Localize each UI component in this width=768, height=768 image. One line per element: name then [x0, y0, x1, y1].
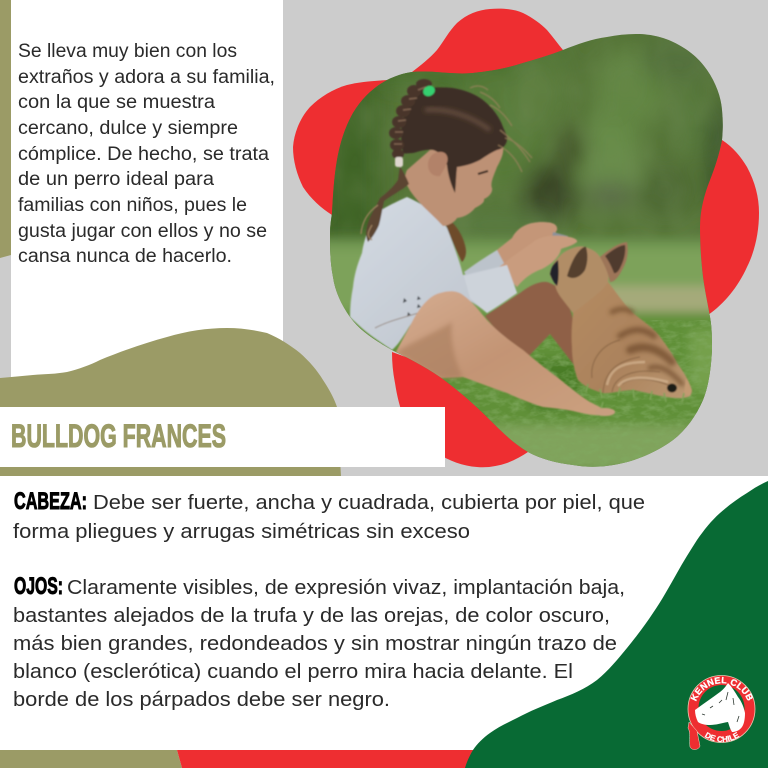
text block: temperament: con la que se muestra — [18, 92, 215, 113]
logo bottom text: DE CHILE — [704, 732, 740, 742]
dog: dark band on back — [612, 309, 682, 384]
text block: cabeza: forma pliegues y arrugas simétricas sin exceso — [13, 520, 470, 543]
logo dog details — [702, 692, 739, 722]
loose wisps — [470, 86, 532, 172]
foot toes — [595, 408, 615, 416]
text block: ojos: OJOS: — [14, 573, 63, 600]
dog: right ear — [600, 242, 628, 282]
text block: ojos: más bien grandes, redondeados y sin mostrar ningún trazo de — [13, 632, 617, 655]
near leg — [396, 291, 610, 415]
grass — [320, 238, 740, 472]
dog: body — [571, 282, 693, 399]
red blobs behind photo — [293, 9, 759, 467]
text block: temperament: familias con niños, pues le — [18, 195, 247, 216]
dog: skin wrinkles — [592, 340, 675, 393]
near sleeve — [464, 265, 517, 313]
braid — [389, 79, 432, 159]
grass texture — [449, 320, 712, 428]
braid highlights — [394, 87, 426, 144]
neck and face — [405, 147, 503, 226]
phone — [552, 232, 568, 238]
ear — [428, 152, 448, 176]
dog: tail/back dark end — [667, 384, 677, 392]
text block: temperament: cómplice. De hecho, se trata — [18, 144, 269, 165]
eye — [478, 171, 488, 174]
far leg — [485, 282, 576, 365]
photo: girl with french bulldog puppy on the grass — [320, 25, 740, 475]
dog: dark muzzle — [550, 260, 559, 286]
highlight on hair — [425, 110, 490, 130]
text block: ojos: blanco (esclerótica) cuando el perro mira hacia delante. El — [13, 660, 573, 683]
near forearm and hand — [498, 236, 577, 287]
front braid — [446, 222, 467, 262]
panel: white title band — [0, 407, 445, 467]
shape: bottom red bar — [177, 750, 490, 768]
text block: temperament: Se lleva muy bien con los — [18, 41, 237, 62]
text block: ojos: Claramente visibles, de expresión vivaz, implantación baja, — [67, 576, 625, 599]
text block: temperament: extraños y adora a su familia, — [18, 67, 275, 88]
logo dog head — [695, 683, 745, 732]
leg shadow under the knee — [396, 322, 463, 379]
text block: cabeza — [13, 488, 645, 543]
shape: olive wave — [0, 328, 341, 476]
dog: hind highlight — [685, 380, 691, 396]
text block: ojos — [13, 573, 625, 711]
logo scarf — [688, 722, 700, 750]
scrunchie white — [395, 157, 403, 167]
text block: cabeza: CABEZA: — [14, 488, 87, 515]
text block: temperament: gusta jugar con ellos y no se — [18, 221, 267, 242]
text block: temperament: de un perro ideal para — [18, 169, 214, 190]
panel: bottom white area — [0, 476, 768, 768]
text block: ojos: bastantes alejados de la trufa y de las orejas, de color oscuro, — [13, 604, 610, 627]
icon: Kennel Club de Chile logo — [688, 675, 756, 750]
shirt print — [403, 296, 421, 317]
girl: far arm and hand — [496, 221, 558, 264]
text block: temperament: cansa nunca de hacerlo. — [18, 246, 232, 267]
text block: cabeza: Debe ser fuerte, ancha y cuadrada, cubierta por piel, que — [93, 491, 645, 514]
text block: ojos: borde de los párpados debe ser negro. — [13, 688, 390, 711]
foreground grass over the dog — [586, 384, 685, 408]
shape: green wave — [465, 481, 768, 768]
tree texture — [354, 104, 722, 220]
heading: breed name: BULLDOG FRANCES — [11, 418, 226, 454]
shape: bottom olive bar — [0, 750, 182, 768]
dog: inner right ear — [605, 245, 625, 273]
dog: left ear — [567, 247, 587, 278]
ponytail — [366, 166, 409, 242]
dog: head — [550, 246, 609, 313]
background: grey page — [0, 0, 768, 476]
accent: olive side bar — [0, 0, 11, 258]
panel: white text panel top left — [11, 0, 283, 385]
ponytail wisps — [361, 205, 378, 240]
logo top text: KENNEL CLUB — [690, 676, 753, 702]
girl: shirt — [349, 196, 486, 350]
far sleeve — [464, 250, 504, 276]
text block: temperament — [18, 41, 275, 267]
hair — [401, 87, 507, 193]
hair band green — [422, 84, 436, 98]
text block: temperament: cercano, dulce y siempre — [18, 118, 238, 139]
